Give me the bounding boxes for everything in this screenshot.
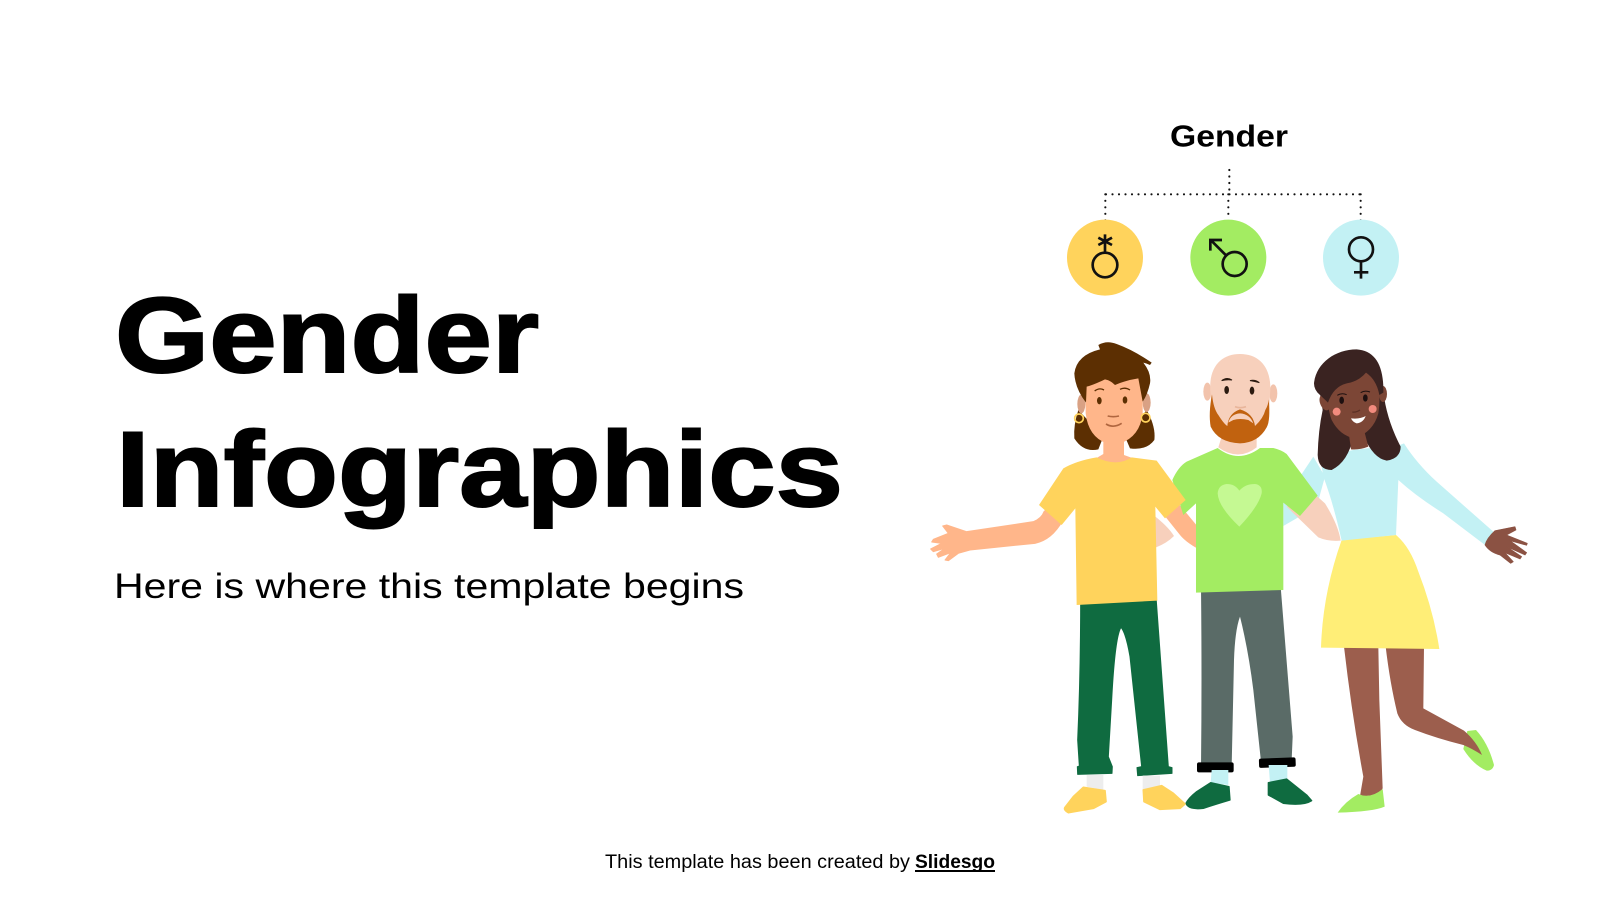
gender tree diagram (1067, 120, 1399, 296)
icon: male symbol (1190, 220, 1266, 296)
shoes (1065, 786, 1185, 813)
title: Infographics (116, 409, 843, 529)
socks (1087, 775, 1160, 790)
socks (1211, 765, 1287, 785)
head (1210, 354, 1270, 443)
illustration: three friends (931, 342, 1527, 813)
earrings (1075, 413, 1150, 423)
icon: female symbol (1323, 220, 1399, 296)
green t-shirt (1172, 448, 1318, 593)
eyes and brows (1222, 378, 1259, 395)
smile (1106, 416, 1122, 426)
yellow t-shirt (1039, 457, 1186, 605)
skirt (1321, 535, 1439, 649)
heading: Gender: Gender (1170, 120, 1288, 154)
eyes and brows (1095, 388, 1130, 404)
mouth (1228, 413, 1253, 423)
smile (1351, 416, 1366, 423)
nose (1352, 410, 1360, 412)
person: bald man with beard (1172, 354, 1341, 809)
hand (1485, 527, 1527, 563)
ears (1317, 386, 1387, 412)
fringe (1314, 349, 1383, 403)
face (1085, 370, 1143, 445)
title: Gender (115, 275, 539, 395)
left arm and hand (931, 503, 1063, 561)
legs and shoes (1338, 647, 1494, 813)
blue top with arm (1320, 443, 1493, 545)
ears (1203, 383, 1277, 402)
beard (1210, 394, 1269, 443)
nose (1235, 407, 1246, 408)
footer credit: This template has been created by (605, 852, 911, 873)
footer credit: Slidesgo (915, 852, 995, 873)
long hair (1318, 392, 1401, 470)
trousers (1201, 587, 1293, 767)
dotted connector (1105, 170, 1361, 222)
cheeks (1333, 405, 1377, 416)
trousers (1065, 597, 1185, 813)
icon: non-binary symbol (1067, 220, 1143, 296)
person: woman with short brown hair (931, 342, 1186, 813)
face (1327, 371, 1379, 438)
subtitle: Here is where this template begins (114, 567, 744, 606)
eyes and brows (1337, 391, 1370, 404)
neck (1096, 437, 1133, 463)
person: woman with long dark hair (1314, 349, 1527, 813)
hair back (1074, 410, 1155, 450)
title (115, 275, 843, 529)
shoes (1186, 779, 1312, 809)
hair top (1074, 342, 1152, 403)
right arm (1287, 490, 1341, 541)
neck (1348, 430, 1368, 449)
ears (1077, 393, 1151, 413)
cuffs (1197, 757, 1296, 772)
background arms (1153, 457, 1325, 552)
neck (1218, 437, 1257, 454)
heart (1218, 484, 1262, 527)
